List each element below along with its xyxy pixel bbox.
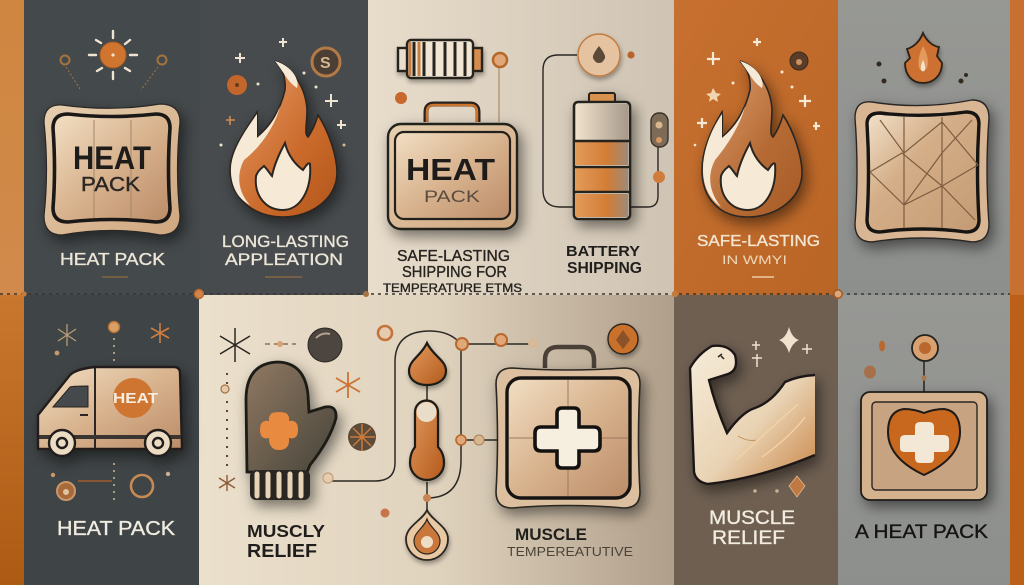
- icon: sun: [60, 31, 166, 90]
- icon: connector nodes: [323, 326, 538, 502]
- icon: battery circuit: [543, 34, 668, 207]
- icon: flame: [230, 61, 337, 217]
- label: heat pack: HEAT PACK: [57, 518, 176, 540]
- panel: muscle relief brown: [690, 327, 815, 549]
- icon: sparkles: [752, 327, 812, 497]
- label: long-lasting application: APPLEATION: [225, 250, 343, 269]
- label: muscle temperature: TEMPEREATUTIVE: [507, 545, 633, 559]
- divider: dotted timeline: [0, 290, 1010, 298]
- label: muscly relief: MUSCLY: [247, 521, 325, 541]
- icon: heat pack case: [388, 104, 517, 229]
- icon: thermometer: [410, 400, 444, 480]
- icon: top accents: [55, 322, 169, 361]
- icon: first aid pack: [496, 347, 640, 508]
- icon: badge and connector: [864, 335, 938, 392]
- icon: sparkles and badges: [220, 38, 346, 146]
- label: muscle relief: [709, 508, 795, 549]
- icon: large battery: [574, 93, 630, 219]
- label: battery shipping: SHIPPING: [567, 260, 642, 277]
- label: safe-lasting shipping: SAFE-LASTING: [397, 248, 510, 265]
- label: long-lasting application: [222, 233, 349, 269]
- icon: snowflakes and dots: [219, 328, 390, 518]
- label: muscle relief: MUSCLE: [709, 508, 795, 529]
- van text: HEAT: [113, 390, 158, 407]
- label: muscle temperature: MUSCLE: [515, 525, 587, 544]
- icon: quilted pillow: [855, 100, 989, 242]
- pack text: HEAT: [73, 140, 151, 176]
- icon: sparkles and badges: S: [320, 55, 331, 72]
- panel: quilted pack: [855, 33, 989, 242]
- icon: delivery van: [38, 367, 182, 456]
- label: safe-lasting in wmyi: IN WMYI: [722, 253, 787, 267]
- label: heat pack: HEAT PACK: [60, 249, 165, 269]
- label: safe-lasting shipping: [383, 248, 522, 295]
- icon: sparkles: [694, 38, 820, 146]
- label: safe-lasting shipping: TEMPERATURE ETMS: [383, 281, 522, 295]
- label: long-lasting application: LONG-LASTING: [222, 233, 349, 251]
- icon: connector dots: [395, 53, 507, 122]
- icon: orange badge: [608, 324, 638, 354]
- icon: muscle highlights: [718, 354, 805, 460]
- icon: heat pack pillow: PACK: [81, 174, 141, 196]
- panel: heat pack top left: [44, 31, 180, 269]
- underline accent: [102, 276, 302, 278]
- icon: heart pack: [861, 392, 987, 500]
- panel: van: [38, 322, 182, 540]
- icon: heat droplet: [409, 343, 446, 385]
- icon: bottom droplet: [406, 510, 448, 560]
- icon: mitten: [246, 362, 336, 500]
- label: muscle relief: RELIEF: [712, 528, 785, 549]
- label: battery shipping: [566, 243, 642, 277]
- label: muscly relief: [247, 521, 325, 561]
- label: safe-lasting in wmyi: SAFE-LASTING: [697, 233, 820, 250]
- panel: muscle relief central: [219, 324, 640, 561]
- icon: heat pack pillow: [44, 104, 180, 235]
- panel: safe-lasting orange: [694, 38, 820, 277]
- panel: long-lasting flame: [220, 38, 349, 269]
- icon: bottom accents: [51, 463, 170, 503]
- label: a heat pack: A HEAT PACK: [855, 522, 988, 543]
- icon: heat pack case: PACK: [424, 187, 481, 206]
- icon: striped battery: [398, 40, 482, 78]
- icon: flexed arm: [690, 346, 815, 484]
- icon: circuit lines: [328, 331, 533, 510]
- label: muscle temperature: [507, 525, 633, 559]
- panel: a heat pack: [855, 335, 988, 543]
- icon: cream flame: [702, 61, 802, 217]
- case text: HEAT: [406, 152, 495, 187]
- label: muscly relief: RELIEF: [247, 541, 317, 561]
- panel: safe shipping: [383, 34, 668, 295]
- label: safe-lasting shipping: SHIPPING FOR: [402, 264, 507, 281]
- label: battery shipping: BATTERY: [566, 243, 640, 260]
- icon: small flame: [876, 33, 968, 84]
- label: safe-lasting in wmyi: [697, 233, 820, 277]
